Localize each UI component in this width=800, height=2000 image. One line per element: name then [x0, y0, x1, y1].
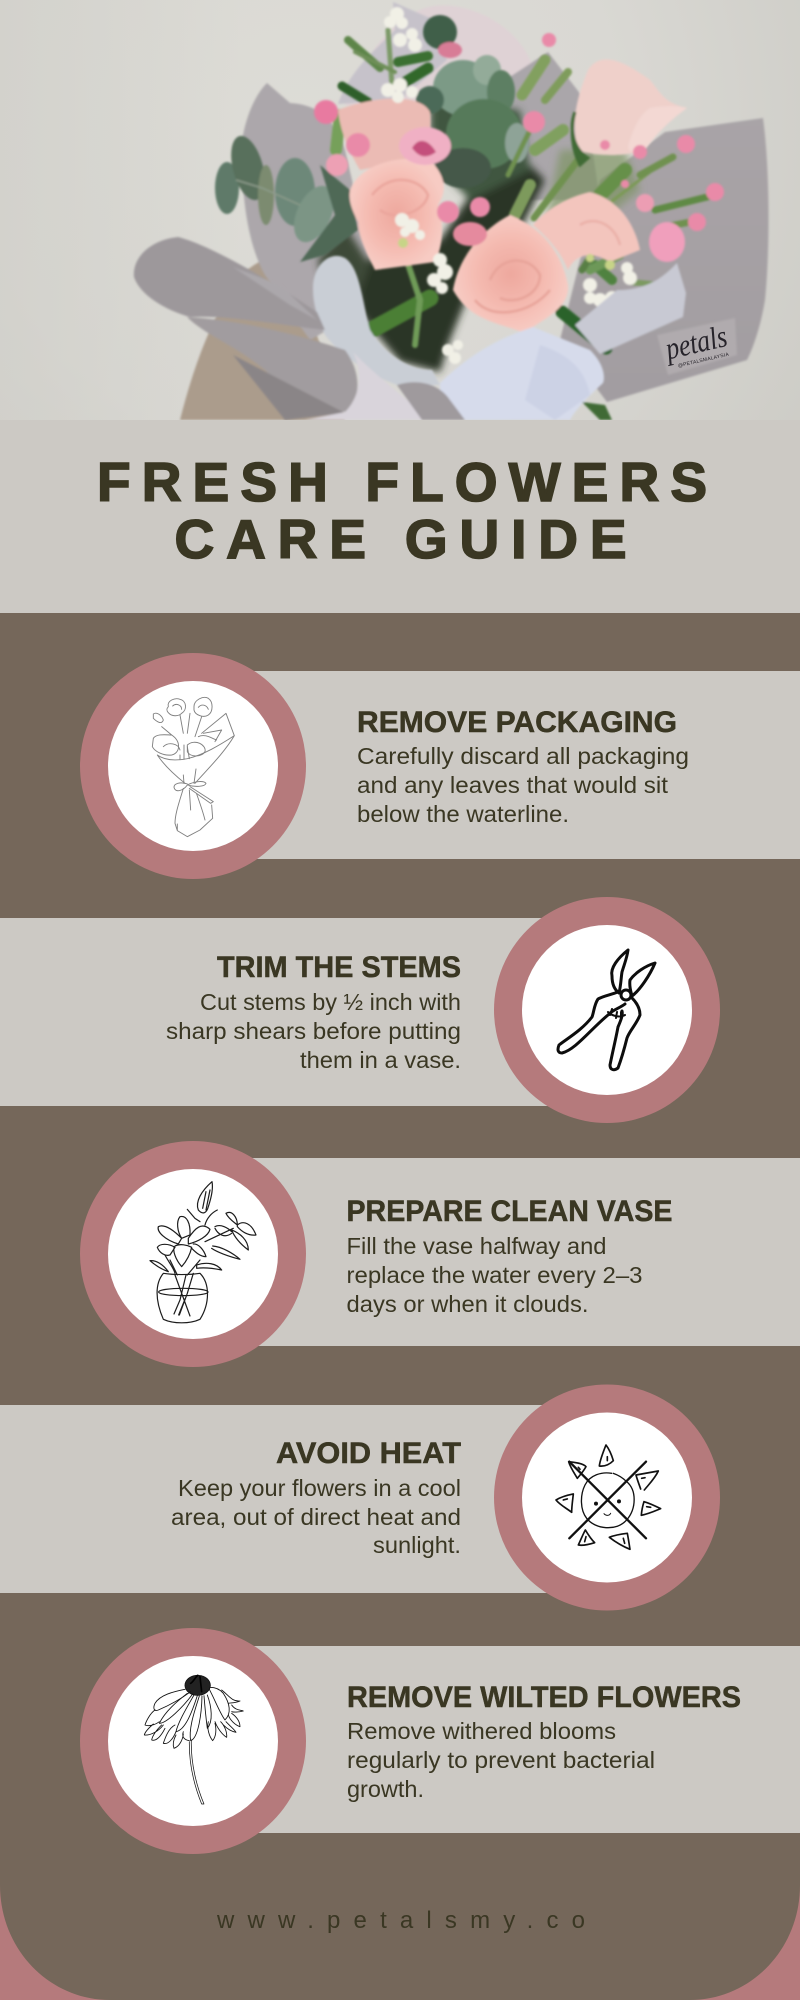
- eucalyptus leaves: [215, 15, 529, 262]
- panel: remove packaging: [80, 653, 800, 879]
- title heading: [97, 451, 707, 570]
- title heading: FRESH FLOWERS: [97, 451, 707, 513]
- wrapping tissue and folded paper: [575, 263, 686, 354]
- footer website: www.petalsmy.co: [216, 1907, 585, 1934]
- body text: sharp shears before putting: [166, 1018, 461, 1044]
- body text: Keep your flowers in a cool: [178, 1475, 461, 1501]
- heading: REMOVE PACKAGING: [357, 706, 677, 739]
- body text: days or when it clouds.: [346, 1291, 588, 1317]
- foliage shadow mass: [318, 100, 640, 372]
- panel: remove wilted flowers: [80, 1628, 800, 1854]
- body text: regularly to prevent bacterial: [347, 1747, 655, 1773]
- body text: [166, 989, 461, 1073]
- body text: [346, 1233, 642, 1317]
- body text: them in a vase.: [300, 1047, 461, 1073]
- brand label: petals: petals: [660, 318, 730, 367]
- panel: trim the stems: [0, 897, 720, 1123]
- body text: below the waterline.: [357, 801, 569, 827]
- icon: lilies in a vase: [150, 1182, 256, 1323]
- icon: wrapped bouquet: [152, 697, 234, 837]
- body text: Remove withered blooms: [347, 1718, 616, 1744]
- icon: crossed-out sun: [556, 1445, 661, 1549]
- body text: growth.: [347, 1776, 424, 1802]
- body text: [347, 1718, 655, 1802]
- white flowers: [381, 7, 637, 364]
- body text: Carefully discard all packaging: [357, 743, 689, 769]
- photo: hand holding a pink rose bouquet: [0, 0, 800, 420]
- bottom pink corners: [0, 1885, 800, 2000]
- green leaves and stems: [336, 30, 715, 348]
- carnations: [314, 33, 724, 262]
- heading: AVOID HEAT: [276, 1437, 461, 1470]
- icon: wilted coneflower: [144, 1675, 243, 1804]
- brand label: petals: [666, 326, 729, 368]
- roses: [338, 99, 431, 170]
- body text: and any leaves that would sit: [357, 772, 668, 798]
- body text: replace the water every 2–3: [346, 1262, 642, 1288]
- body text: area, out of direct heat and: [171, 1504, 461, 1530]
- heading: TRIM THE STEMS: [217, 951, 461, 984]
- heading: REMOVE WILTED FLOWERS: [347, 1681, 741, 1714]
- title panel: [0, 420, 800, 613]
- panel: avoid heat: [0, 1384, 720, 1610]
- wrap label: [657, 318, 737, 375]
- icon: pruning shears: [558, 950, 655, 1070]
- heading: PREPARE CLEAN VASE: [346, 1195, 672, 1228]
- brand label: petals: @PETALSMALAYSIA: [677, 352, 730, 369]
- body text: sunlight.: [373, 1532, 461, 1558]
- panel: prepare clean vase: [80, 1141, 800, 1367]
- body text: [357, 743, 689, 827]
- body text: Fill the vase halfway and: [346, 1233, 606, 1259]
- title heading: CARE GUIDE: [174, 508, 626, 570]
- body text: [171, 1475, 461, 1558]
- body text: Cut stems by ½ inch with: [200, 989, 461, 1015]
